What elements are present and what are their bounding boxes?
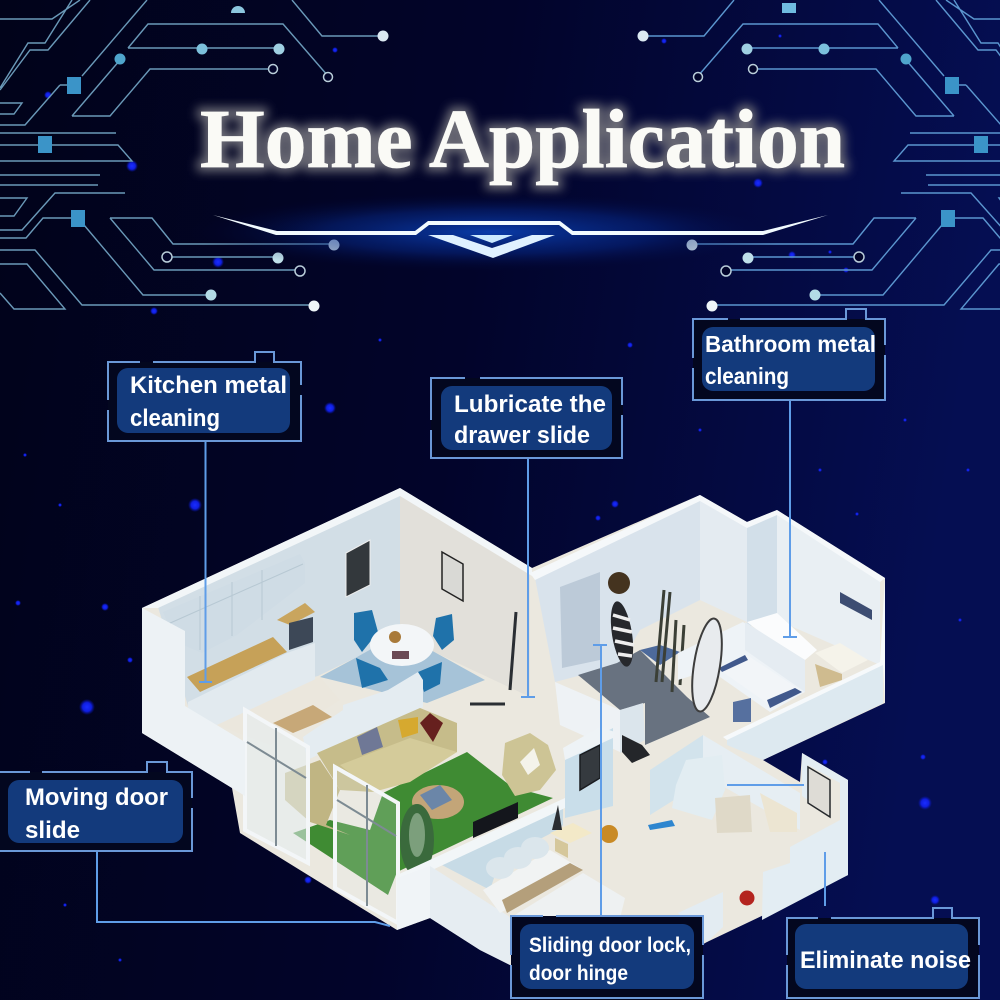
callout: kitchen metal cleaning: [108, 352, 301, 442]
blue floor bands: [719, 655, 802, 708]
oven: [289, 617, 313, 650]
callout: bathroom metal cleaning: Bathroom metal: [705, 331, 876, 357]
connector lines: [97, 400, 825, 926]
snowboard: [607, 600, 637, 668]
callout: kitchen metal cleaning: cleaning: [130, 405, 220, 432]
title: Home Application: [200, 93, 845, 186]
cushion: yellow: [398, 717, 418, 738]
house base silhouette: [142, 488, 885, 990]
bedroom floor: [490, 825, 620, 918]
small circuit node: top right: [782, 3, 796, 13]
wall cap: right rooms: [530, 495, 885, 582]
nightstand legs: [555, 838, 568, 858]
dining table: [370, 624, 434, 666]
picture: portrait: [442, 552, 463, 601]
sofa back: [317, 708, 457, 792]
small circuit node: top left: [231, 6, 245, 13]
mattress: [483, 850, 580, 913]
callout: lubricate the drawer slide: [431, 378, 623, 459]
callout: lubricate the drawer slide: Lubricate the: [454, 391, 606, 418]
callout: moving door slide: slide: [25, 817, 80, 844]
duvet: [510, 873, 625, 918]
sofa seat: [340, 738, 457, 792]
bedroom left wall: [430, 866, 510, 965]
inline skates: [622, 735, 650, 763]
lower room back wall: right: [703, 735, 800, 830]
bath alcove wall: [747, 514, 777, 627]
surfboard: [687, 617, 727, 713]
callout: sliding door lock, door hinge: [511, 916, 703, 1000]
skis: [656, 590, 684, 692]
low gray wall: [620, 703, 645, 753]
callout: bathroom metal cleaning: cleaning: [705, 363, 789, 389]
isometric home cutaway: [142, 488, 885, 990]
circuit lines: right: [638, 0, 1000, 312]
cabinet panel lines: [168, 564, 303, 650]
easel canvas: [715, 795, 752, 833]
wall hat: [608, 572, 630, 594]
green rug: [293, 752, 553, 895]
bathroom front wall: [727, 663, 883, 760]
bathroom sink: [815, 643, 868, 673]
window wall: right: [335, 767, 398, 923]
kitchen lower cabinets: [188, 643, 315, 725]
corner desk: [760, 793, 797, 832]
kitchen upper cabinets: [163, 554, 305, 653]
front wall cap: [723, 578, 885, 740]
window mullions: right: [337, 785, 396, 906]
callout: sliding door lock, door hinge: Sliding door lock,: [529, 934, 691, 957]
window mullions: left: [247, 728, 306, 846]
bedroom wall cap: [397, 798, 565, 885]
bathroom floor: [720, 655, 800, 703]
right room back wall: [535, 500, 700, 682]
kitchen floor: [217, 677, 340, 745]
bedroom back wall: [438, 803, 563, 890]
pillows: [486, 837, 549, 879]
flippers: [648, 820, 675, 830]
pillar cap: [563, 727, 615, 760]
nightstand: [550, 823, 592, 843]
bathtub: [747, 613, 817, 660]
cushion: slate: [357, 727, 383, 755]
blue toilet base: [733, 698, 751, 722]
callout: sliding door lock, door hinge: door hinge: [529, 962, 628, 985]
red object: [740, 890, 754, 906]
partition wall: [303, 672, 423, 760]
lower picture: [808, 767, 830, 817]
toilet alcove: [640, 645, 680, 665]
gray floor: [578, 650, 710, 745]
callout: moving door slide: Moving door: [25, 784, 168, 811]
armchair pillow: [520, 748, 540, 775]
snowboard stripes: [613, 615, 634, 656]
kitchen back wall: [158, 495, 400, 706]
kitchen end wall: [142, 608, 245, 796]
television: [473, 802, 518, 838]
right room pillar wall: [700, 500, 747, 622]
callout: lubricate the drawer slide: drawer slide: [454, 422, 590, 449]
title: Home Application: [200, 93, 845, 186]
callout: eliminate noise: Eliminate noise: [800, 947, 971, 974]
picture: 312: [346, 540, 370, 597]
lower stub wall: [678, 892, 723, 942]
tall counter top: [277, 603, 315, 625]
low white console: [555, 682, 620, 752]
bed throw: [502, 863, 583, 913]
table lamp: [552, 805, 562, 830]
lower room back wall: left: [650, 735, 703, 815]
table items: [389, 631, 409, 659]
sink cabinet: [815, 664, 842, 687]
low bath partition: [678, 622, 805, 712]
kitchen countertop: [187, 637, 287, 692]
pillar picture: [580, 745, 600, 790]
plant: [400, 804, 434, 876]
pillar wall: [565, 728, 613, 818]
cushion: maroon: [420, 713, 443, 742]
orange ball: [600, 825, 618, 843]
callout: kitchen metal cleaning: Kitchen metal: [130, 372, 287, 399]
callout: bathroom metal cleaning: [693, 309, 885, 400]
plant leaves: [409, 813, 425, 857]
dining chairs: [354, 610, 454, 692]
kitchen floor rug: [273, 705, 332, 733]
door: [560, 572, 600, 668]
hockey stick and sports gear: [470, 612, 516, 704]
circuit lines: left: [0, 0, 388, 312]
armchair: [502, 733, 556, 796]
dining rug: [320, 633, 485, 703]
magazines on table: [420, 785, 452, 810]
light armchair: [672, 755, 725, 820]
lower room end wall: [762, 753, 848, 920]
callout: moving door slide: [0, 762, 192, 852]
glowing title ornament: [190, 192, 828, 272]
living front wall: [397, 866, 430, 930]
callout: eliminate noise: [787, 908, 979, 1000]
bath right wall: [777, 514, 880, 665]
wall cap: kitchen: [142, 488, 532, 608]
coffee table: [412, 785, 464, 819]
sofa left section: [285, 760, 350, 835]
window wall: left: [245, 710, 308, 863]
tub front: [745, 622, 805, 692]
speckled back wall: [400, 495, 530, 697]
mirror band: [840, 592, 872, 620]
